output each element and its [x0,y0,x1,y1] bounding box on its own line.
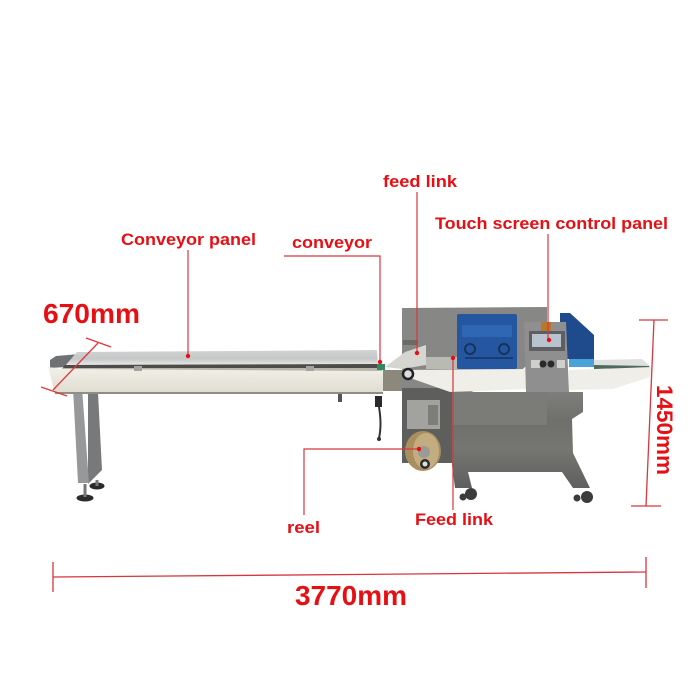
conveyor feet [76,480,104,502]
label: 3770mm: 3770mm [295,580,407,611]
control buttons [531,360,565,368]
film unit box [407,400,440,429]
junction block [383,370,405,391]
conveyor side band [48,367,383,393]
callout: feed link top [415,192,419,355]
conveyor front leg [73,388,89,483]
callout: feed link bottom [451,356,455,510]
callout: reel [304,447,421,515]
conveyor brackets [134,366,314,371]
right belt surface [594,359,650,366]
casters [460,488,593,503]
label: 1450mm: 1450mm [652,385,677,475]
blue cover [457,314,517,369]
conveyor section [48,350,385,502]
left white table [403,369,527,392]
control column [524,322,569,392]
label: 670mm: 670mm [43,298,140,329]
label: touch screen control panel: Touch screen control panel [435,214,668,233]
label: conveyor: conveyor [292,233,372,252]
rear grey panel [402,307,547,463]
feed link plate [385,345,426,369]
label: conveyor panel: Conveyor panel [121,230,256,249]
label: reel: reel [287,518,320,537]
conveyor dark belt edge [62,364,382,369]
dimension: 670mm width [41,338,111,396]
feed roller [403,369,413,379]
wrapping machine [383,307,652,503]
emergency stop [541,322,551,332]
right conveyor belt [594,365,650,369]
dimension: 3770mm length [53,557,646,592]
callout: conveyor panel [186,250,190,358]
conveyor tan strip [62,368,382,372]
film reel [405,431,441,471]
right white table [569,367,652,390]
conveyor panel surface [65,350,378,366]
callout: conveyor [284,256,382,364]
switch and cable [338,394,382,441]
lower body with legs [452,392,590,488]
lower left housing [402,388,452,463]
dimension: 1450mm height [631,320,668,506]
label: feed link bottom: Feed link [415,510,494,529]
rear blue guard [560,313,594,359]
dark bracket above feed plate [403,340,418,345]
label: feed link top: feed link [383,172,458,191]
callout: touch screen [547,234,551,342]
green belt end [377,364,385,370]
conveyor rear leg [88,393,102,484]
touch screen [529,331,565,351]
conveyor end cap [50,354,80,368]
